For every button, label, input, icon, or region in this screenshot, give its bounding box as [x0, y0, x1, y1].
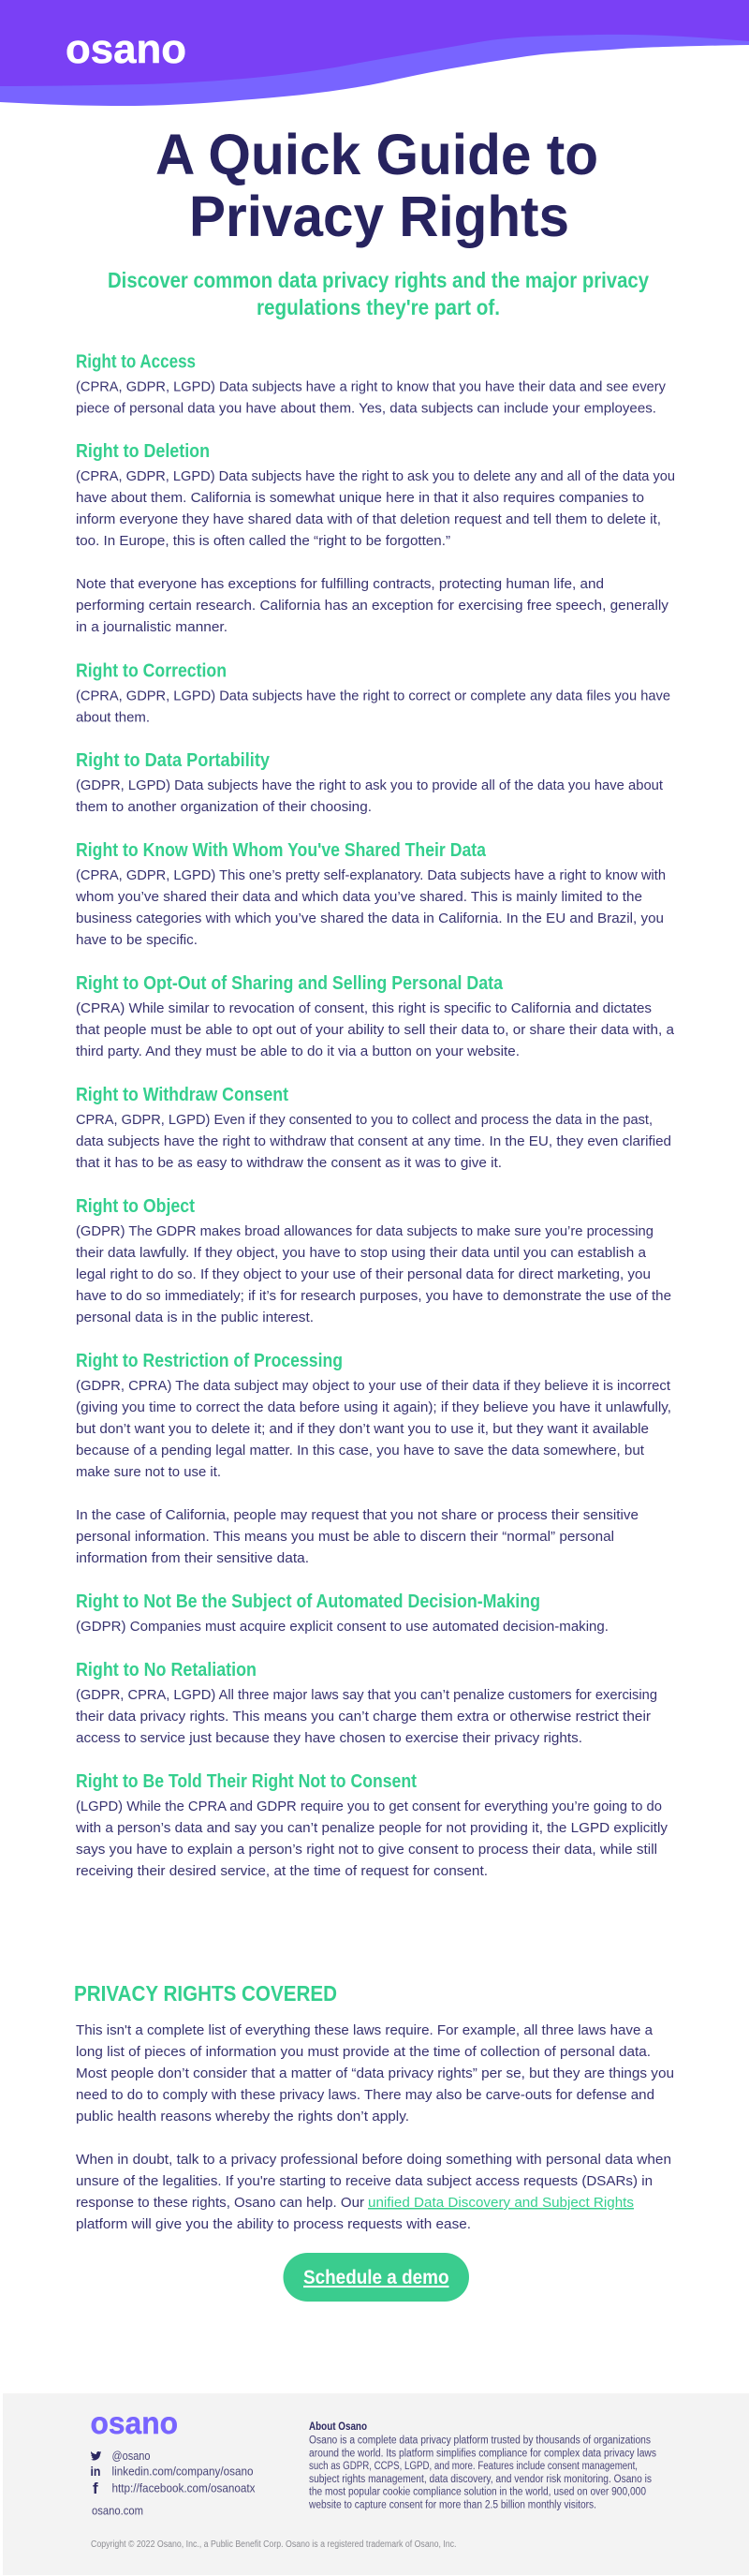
section: right to opt-out: [76, 973, 675, 1059]
text block: privacy rights covered: public health reasons whereby the rights don’t apply.: [76, 2109, 409, 2124]
section: right to data portability: (GDPR, LGPD) Data subjects have the right to ask you to provide all of the data you have about: [76, 777, 664, 793]
section: right to access: Right to Access: [76, 352, 196, 373]
subtitle: [108, 268, 649, 319]
section: right to not be subject of automated decision-making: (GDPR) Companies must acquire explicit consent to use automated decision-making.: [76, 1619, 609, 1635]
section: right to know with whom: have to be specific.: [76, 932, 198, 948]
section: right to correction: [76, 661, 670, 725]
section: right to deletion: inform everyone they have shared data with of that deletion request and tell them to delete it,: [76, 511, 661, 527]
text block: privacy rights covered: This isn't a complete list of everything these laws require. For example, all three laws have a: [76, 2022, 654, 2038]
social links: osano.com: [92, 2505, 143, 2518]
header wave banner: [0, 0, 749, 106]
about osano: subject rights management, data discovery, and vendor risk monitoring. Osano is: [309, 2474, 652, 2485]
section: right to deletion: performing certain research. California has an exception for exercising free speech, generally: [76, 598, 669, 614]
section: right to restriction of processing: [76, 1351, 671, 1566]
section: right to no retaliation: their data privacy rights. This means you can’t charge them extra or otherwise restrict their: [76, 1709, 651, 1725]
icon: twitter: [91, 2451, 101, 2460]
footer logo: osano: osano: [90, 2406, 178, 2440]
section: right to restriction of processing: make sure not to use it.: [76, 1464, 221, 1480]
section: right to be told: receiving their desired service, at the time of request for consent.: [76, 1863, 488, 1879]
section: right to deletion: in a journalistic manner.: [76, 619, 228, 635]
section: right to correction: about them.: [76, 710, 150, 725]
section: right to opt-out: third party. And they must be able to do it via a button on your website.: [76, 1044, 520, 1059]
text block: privacy rights covered: unsure of the legalities. If you're starting to receive data subject access requests (DSARs) in: [76, 2173, 653, 2189]
section: right to withdraw consent: data subjects have the right to withdraw that consent at any time. In the EU, they even clarified: [76, 1133, 671, 1149]
section: right to object: [76, 1196, 671, 1325]
section: right to not be subject of automated decision-making: [76, 1591, 609, 1635]
section: right to deletion: Note that everyone has exceptions for fulfilling contracts, protecting human life, and: [76, 576, 604, 592]
section: right to opt-out: Right to Opt-Out of Sharing and Selling Personal Data: [76, 973, 504, 994]
section: right to opt-out: (CPRA) While similar to revocation of consent, this right is specific to California and dictates: [76, 1000, 652, 1016]
about osano: such as GDPR, CCPS, LGPD, and more. Features include consent management,: [309, 2461, 638, 2472]
text block: privacy rights covered: [76, 2022, 674, 2232]
subtitle: regulations they're part of.: [257, 295, 500, 319]
section: right to no retaliation: (GDPR, CPRA, LGPD) All three major laws say that you can’t penalize customers for exercising: [76, 1687, 657, 1703]
section: right to deletion: [76, 441, 675, 635]
panel: footer: [3, 2393, 749, 2575]
about osano: About Osano: [309, 2420, 367, 2433]
section: right to deletion: too. In Europe, this is often called the “right to be forgotten.”: [76, 533, 450, 549]
section: right to restriction of processing: Right to Restriction of Processing: [76, 1351, 343, 1371]
button: schedule a demo: Schedule a demo: [303, 2267, 449, 2288]
section: right to be told: (LGPD) While the CPRA and GDPR require you to get consent for everything you’re going to do: [76, 1799, 662, 1814]
section: right to correction: (CPRA, GDPR, LGPD) Data subjects have the right to correct or complete any data files you have: [76, 688, 670, 704]
section: right to no retaliation: Right to No Retaliation: [76, 1660, 257, 1680]
section: right to restriction of processing: (GDPR, CPRA) The data subject may object to your use of their data if they believe it is incorrect: [76, 1378, 671, 1394]
section: right to access: piece of personal data you have about them. Yes, data subjects can include your employees.: [76, 401, 656, 416]
social links: linkedin.com/company/osano: [112, 2465, 254, 2479]
about osano: the most popular cookie compliance solution in the world, used on over 900,000: [309, 2486, 646, 2497]
about osano: around the world. Its platform simplifies compliance for complex data privacy laws: [309, 2448, 656, 2459]
section: right to restriction of processing: because of a pending legal matter. In this case, you have to save the data somewhere, but: [76, 1443, 645, 1458]
icon: facebook: f: [93, 2480, 98, 2497]
section: right to withdraw consent: CPRA, GDPR, LGPD) Even if they consented to you to collect and process the data in the past,: [76, 1112, 653, 1128]
section: right to object: have to do so immediately; if it’s for research purposes, you have to demonstrate the use of the: [76, 1288, 671, 1304]
section: right to data portability: them to another organization of their choosing.: [76, 799, 372, 815]
section: right to access: [76, 352, 666, 416]
section: right to restriction of processing: personal information. This means you must be able to discern their “normal” personal: [76, 1529, 614, 1545]
text block: privacy rights covered: Most people don’t consider that a matter of “data privacy rights” per se, but they are things you: [76, 2065, 674, 2081]
section: right to deletion: (CPRA, GDPR, LGPD) Data subjects have the right to ask you to delete any and all of the data you: [76, 468, 675, 484]
section: right to data portability: Right to Data Portability: [76, 750, 271, 771]
section: right to withdraw consent: [76, 1085, 671, 1171]
heading: privacy rights covered: PRIVACY RIGHTS COVERED: [74, 1981, 337, 2006]
text block: privacy rights covered: unified Data Discovery and Subject Rights: [368, 2195, 634, 2211]
section: right to deletion: Right to Deletion: [76, 441, 210, 462]
section: right to withdraw consent: that it has to be as easy to withdraw the consent as it was to give it.: [76, 1155, 502, 1171]
social links: @osano: [112, 2450, 151, 2463]
section: right to know with whom: (CPRA, GDPR, LGPD) This one’s pretty self-explanatory. Data subjects have a right to know with: [76, 867, 666, 883]
about osano: website to capture consent for more than 2.5 billion monthly visitors.: [308, 2499, 596, 2510]
section: right to be told: [75, 1771, 668, 1879]
section: right to deletion: have about them. California is somewhat unique here in that it also requires companies to: [76, 490, 644, 506]
section: right to object: personal data is in the public interest.: [76, 1310, 314, 1325]
section: right to object: their data lawfully. If they object, you have to stop using their data until you can establish a: [76, 1245, 647, 1261]
section: right to object: legal right to do so. If they object to your use of their personal data for direct marketing, you: [76, 1266, 651, 1282]
title: A Quick Guide to: [155, 123, 598, 186]
social links: http://facebook.com/osanoatx: [112, 2482, 256, 2495]
section: right to restriction of processing: (giving you time to correct the data before using it again); if they believe you have it unlawfully,: [76, 1399, 671, 1415]
section: right to object: Right to Object: [76, 1196, 195, 1217]
about osano: Osano is a complete data privacy platform trusted by thousands of organizations: [309, 2435, 651, 2447]
section: right to know with whom: Right to Know With Whom You've Shared Their Data: [76, 840, 487, 861]
button: schedule a demo: [283, 2253, 469, 2302]
social links: [92, 2450, 256, 2518]
section: right to restriction of processing: information from their sensitive data.: [76, 1550, 309, 1566]
text block: privacy rights covered: need to do to comply with these privacy laws. There may also be carve-outs for defense and: [76, 2087, 654, 2103]
section: right to access: (CPRA, GDPR, LGPD) Data subjects have a right to know that you have their data and see every: [76, 378, 666, 395]
section: right to opt-out: that people must be able to opt out of your ability to sell their data to, or share their data with, a: [76, 1022, 675, 1038]
section: right to be told: says you have to explain a person’s right not to give consent to process their data, while still: [76, 1842, 657, 1858]
icon: linkedin: in: [90, 2464, 101, 2479]
section: right to correction: Right to Correction: [76, 661, 227, 682]
section: right to know with whom: whom you’ve shared their data and which data you’ve shared. This is mainly limited to the: [75, 889, 642, 905]
title: [155, 123, 598, 248]
subtitle: Discover common data privacy rights and the major privacy: [108, 268, 649, 292]
text block: privacy rights covered: long list of pieces of information you must provide at the time of collection of personal data.: [76, 2044, 651, 2060]
section: right to data portability: [76, 750, 664, 815]
section: right to know with whom: business categories with which you’ve shared the data in California. In the EU and Brazil, you: [76, 910, 664, 926]
text block: privacy rights covered: platform will give you the ability to process requests with ease.: [76, 2216, 471, 2232]
logo: osano: osano: [66, 26, 186, 72]
text block: privacy rights covered: When in doubt, talk to a privacy professional before doing something with personal data when: [76, 2152, 671, 2168]
section: right to not be subject of automated decision-making: Right to Not Be the Subject of Automated Decision-Making: [76, 1591, 540, 1612]
section: right to restriction of processing: but don’t want you to delete it; and if they don’t want you to use it, but they want it available: [76, 1421, 649, 1437]
section: right to no retaliation: access to service just because they have chosen to exercise their privacy rights.: [76, 1730, 582, 1746]
section: right to object: (GDPR) The GDPR makes broad allowances for data subjects to make sure you’re processing: [76, 1223, 654, 1239]
section: right to know with whom: [75, 840, 666, 948]
about osano: [308, 2420, 656, 2510]
copyright: Copyright © 2022 Osano, Inc., a Public Benefit Corp. Osano is a registered trademark of Osano, Inc.: [91, 2539, 457, 2550]
section: right to be told: with a person’s data and say you can’t penalize people for not providing it, the LGPD explicitly: [75, 1820, 668, 1836]
title: Privacy Rights: [189, 185, 569, 248]
section: right to be told: Right to Be Told Their Right Not to Consent: [76, 1771, 417, 1792]
section: right to restriction of processing: In the case of California, people may request that you not share or process their sensitive: [76, 1507, 639, 1523]
section: right to no retaliation: [76, 1660, 657, 1746]
section: right to withdraw consent: Right to Withdraw Consent: [76, 1085, 288, 1105]
text block: privacy rights covered: response to these rights, Osano can help. Our: [76, 2195, 364, 2211]
